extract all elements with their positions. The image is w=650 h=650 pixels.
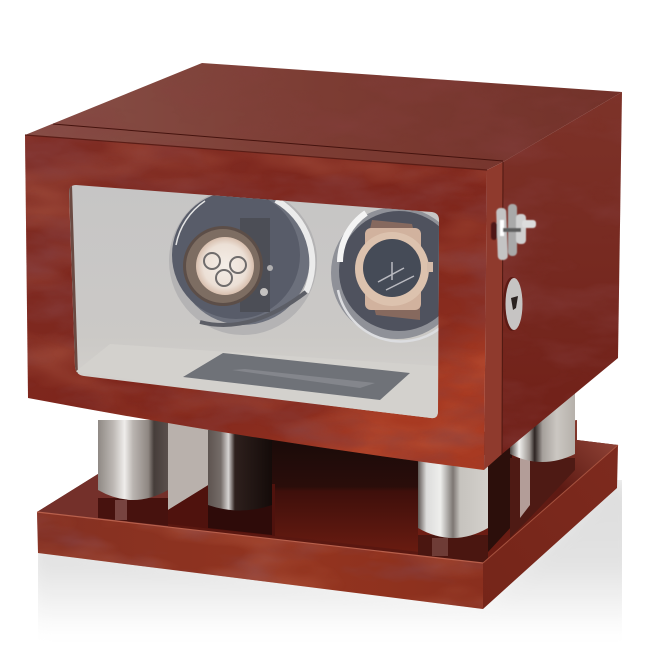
- base front face: [37, 512, 483, 609]
- floor shadow: [38, 480, 622, 615]
- interior floor: [76, 370, 438, 418]
- lid seam: [53, 124, 503, 161]
- cabinet top: [25, 63, 622, 170]
- accessory tray: [183, 353, 410, 400]
- base top surface right: [418, 420, 618, 563]
- base top surface middle: [272, 420, 420, 552]
- cabinet body: [20, 60, 630, 475]
- pillar: front left: [98, 420, 168, 500]
- pillar: back middle: [208, 430, 272, 510]
- left winder: [169, 187, 317, 335]
- glass window: [69, 185, 463, 420]
- base plinth: [30, 420, 618, 615]
- window left bevel: [69, 185, 78, 376]
- background seen between pillars: [168, 420, 210, 510]
- product illustration: watch winder: [25, 63, 622, 615]
- pillars: [98, 392, 575, 538]
- left watch: [240, 218, 270, 312]
- key lock plate: [503, 277, 522, 331]
- right winder: [331, 208, 439, 343]
- pillar: front right: [418, 455, 488, 538]
- pillar reflections: [98, 498, 168, 526]
- cabinet door side: [484, 162, 503, 470]
- right watch: [370, 220, 413, 228]
- front latch: [491, 204, 536, 260]
- cabinet front: [25, 135, 487, 470]
- base top surface left: [37, 474, 168, 530]
- base top surface: [37, 440, 618, 563]
- base right face: [483, 445, 618, 609]
- cabinet right side: [502, 92, 622, 454]
- pillar: back right: [510, 392, 575, 462]
